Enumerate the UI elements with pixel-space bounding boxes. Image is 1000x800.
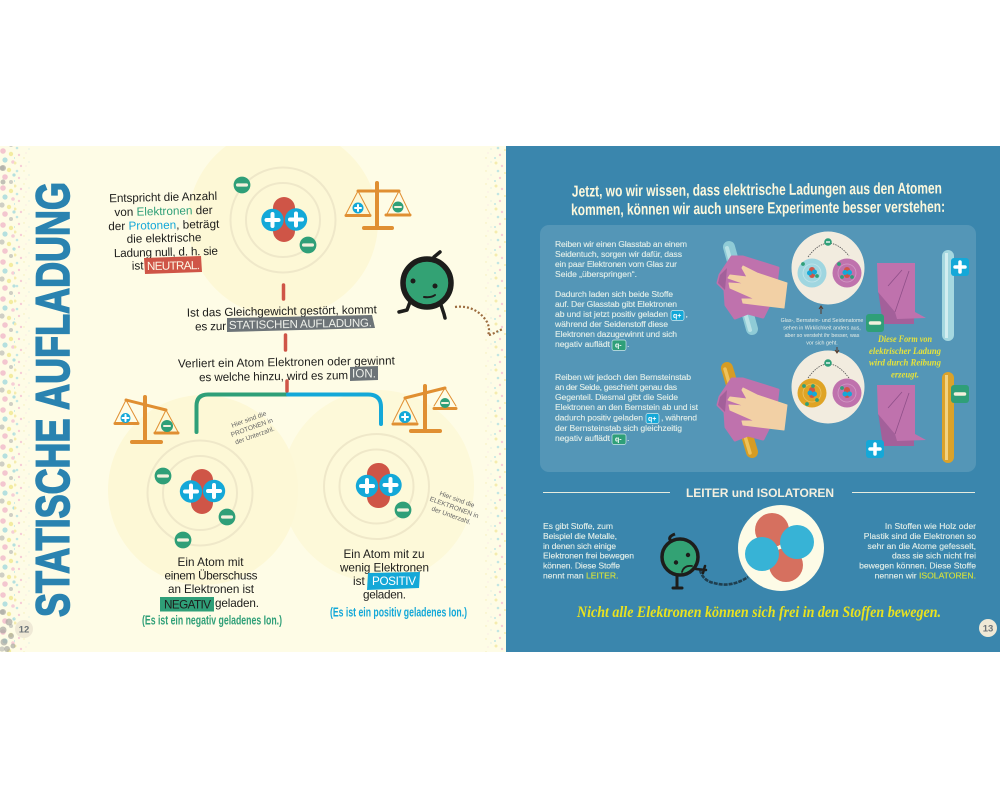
character: running electron (399, 252, 503, 335)
note: atoms simplified, with arrows: sehen in Wirklichkeit anders aus, (783, 326, 861, 332)
text: conductors: nennt man LEITER. (543, 570, 618, 580)
caption: positive ion: (Es ist ein positiv geladenes Ion.) (330, 606, 467, 620)
text: glass rod experiment: Seidentuch, sorgen wir dafür, dass (555, 249, 682, 259)
callout: friction: erzeugt. (891, 370, 919, 380)
text: conductors: Elektronen frei bewegen (543, 550, 634, 560)
text: neutral explanation: die elektrische (127, 231, 202, 246)
text: neutral explanation: ist (132, 259, 144, 273)
text: ion definition: es welche hinzu, wird es zum (199, 369, 348, 384)
text: glass rod experiment: Seide „überspringen“. (555, 269, 637, 279)
text: amber rod experiment: q+ (648, 416, 656, 423)
text: positive atom: Ein Atom mit zu (344, 548, 424, 561)
text: static charge: Ist das Gleichgewicht gestört, kommt (187, 303, 378, 320)
panel: right page background (506, 146, 1000, 652)
text: positive atom: geladen. (363, 588, 406, 602)
text: negative atom: einem Überschuss (164, 570, 258, 582)
text: insulators: sehr an die Atome gefesselt, (868, 541, 976, 551)
conclusion: Nicht alle Elektronen können sich frei in den Stoffen bewegen. (576, 604, 941, 621)
note: electrons in minority: Hier sind die (438, 490, 476, 510)
callout: friction: wird durch Reibung (869, 358, 941, 368)
illustration: silk cloth, charged positive (877, 385, 926, 446)
illustration: hand rubbing amber rod (718, 368, 787, 453)
illustration: hand rubbing glass rod (718, 247, 787, 330)
note: atoms simplified, with arrows: Glas-, Bernstein- und Seidenatome (781, 318, 863, 324)
text: amber rod experiment (555, 372, 699, 444)
text: insulators: bewegen können. Diese Stoffe (859, 560, 976, 570)
text: insulators: nennen wir ISOLATOREN. (875, 570, 976, 580)
text: amber rod experiment: Elektronen an den Bernstein ab und ist (555, 402, 699, 412)
text: glass rod experiment: Reiben wir einen Glasstab an einem (555, 239, 687, 249)
text: positive atom (339, 548, 429, 602)
text: amber rod experiment: dadurch positiv geladen (555, 412, 643, 422)
text: glass rod experiment: Elektronen dazugewinnt und sich (555, 329, 677, 339)
text: insulators: Plastik sind die Elektronen so (864, 531, 976, 541)
note: atoms simplified, with arrows: vor sich geht. (806, 340, 838, 346)
text: glass rod experiment: . (627, 339, 629, 349)
callout: friction: Diese Form von (877, 335, 932, 345)
text: conductors (543, 521, 634, 580)
text: amber rod experiment: q- (615, 436, 622, 444)
note: atoms simplified, with arrows: aber so versteht ihr besser, was (785, 333, 860, 339)
text: insulators: dass sie sich nicht frei (892, 550, 976, 560)
text: static charge (187, 303, 378, 334)
text: glass rod experiment: auf. Der Glasstab gibt Elektronen (555, 299, 677, 309)
note: electrons in minority (426, 488, 483, 528)
text: negative atom: NEGATIV (164, 598, 211, 612)
text: ion definition (178, 354, 396, 385)
panel: experiments (540, 225, 976, 472)
text: negative atom: geladen. (215, 597, 259, 610)
highlight: ION (350, 366, 378, 381)
illustration: amber rod negative (942, 372, 969, 463)
text: amber rod experiment: negativ auflädt (555, 433, 611, 443)
text: amber rod experiment: an der Seide, geschieht genau das (555, 382, 677, 392)
atom: positive ion (282, 390, 474, 582)
note: protons in minority: Hier sind die (231, 410, 268, 430)
red dashed connector (284, 285, 287, 391)
text: glass rod experiment: ein paar Elektronen vom Glas zur (555, 259, 677, 269)
text: neutral explanation: Ladung null, d. h. sie (114, 245, 218, 260)
text: insulators: In Stoffen wie Holz oder (885, 521, 976, 531)
text: static charge: es zur (195, 320, 226, 334)
note: protons in minority: der Unterzahl. (234, 426, 276, 446)
text: glass rod experiment: negativ auflädt (555, 339, 611, 349)
heading: Leiter und Isolatoren: LEITER und ISOLATOREN (686, 486, 834, 500)
note: protons in minority: PROTONEN in (230, 417, 274, 439)
text: amber rod experiment: Gegenteil. Diesmal gibt die Seide (555, 392, 678, 402)
text: glass rod experiment: , (686, 309, 688, 319)
text: neutral explanation: von Elektronen der (114, 204, 213, 219)
text: amber rod experiment: Reiben wir jedoch den Bernsteinstab (555, 372, 691, 382)
text: negative atom (160, 556, 259, 612)
text: neutral explanation: Entspricht die Anzahl (109, 190, 217, 205)
highlight: STATISCHEN AUFLADUNG: STATISCHEN AUFLADUNG. (229, 318, 372, 332)
illustration: atomic nucleus (738, 505, 824, 591)
text: neutral explanation (108, 190, 221, 273)
text: ion definition: Verliert ein Atom Elektronen oder gewinnt (178, 354, 396, 371)
illustration: glass rod positive (942, 250, 969, 341)
text: conductors: Beispiel die Metalle, (543, 531, 617, 541)
character: chained electron (662, 534, 748, 588)
text: glass rod experiment: ab und ist jetzt positiv geladen (555, 309, 668, 319)
scale: balanced (346, 183, 410, 228)
note: electrons in minority: ELEKTRONEN in (429, 496, 480, 520)
text: glass rod experiment: q- (615, 342, 622, 350)
text: conductors: können. Diese Stoffe (543, 560, 620, 570)
callout: friction: elektrischer Ladung (869, 347, 941, 357)
icon: plus on silk (866, 440, 884, 458)
text: insulators (859, 521, 976, 580)
page number 12 (15, 620, 33, 638)
highlight: NEUTRAL: NEUTRAL. (147, 259, 200, 273)
panel: left page background (0, 146, 506, 652)
text: neutral explanation: der Protonen, beträgt (108, 218, 220, 233)
text: amber rod experiment: der Bernsteinstab sich gleichzeitig (555, 423, 682, 433)
note: atoms simplified, with arrows (781, 306, 863, 353)
diagram: glass and silk atoms (792, 232, 864, 304)
page number 13: 13 (983, 624, 993, 634)
text: positive atom: wenig Elektronen (339, 562, 429, 574)
text: amber rod experiment: , während (661, 412, 697, 422)
atom: negative ion (108, 395, 298, 585)
scale: tilted towards protons (393, 386, 456, 431)
icon: minus on silk (866, 314, 884, 332)
bracket connector (196, 394, 381, 432)
page number 13 (979, 619, 997, 637)
text: negative atom: an Elektronen ist (168, 583, 255, 596)
note: protons in minority (227, 409, 277, 447)
diagram: amber and silk atoms (792, 350, 864, 424)
illustration: silk cloth, charged negative (877, 263, 926, 324)
scale: tilted towards electrons (115, 397, 178, 442)
heading: right page (571, 180, 945, 219)
text: positive atom: POSITIV (372, 575, 416, 588)
atom: neutral (188, 146, 378, 317)
text: glass rod experiment (554, 239, 688, 350)
note: electrons in minority: der Unterzahl. (430, 506, 472, 526)
callout: friction (869, 335, 941, 380)
page number 12: 12 (19, 624, 29, 636)
title: Statische Aufladung: STATISCHE AUFLADUNG (26, 182, 79, 617)
text: amber rod experiment: . (627, 433, 629, 443)
text: conductors: Es gibt Stoffe, zum (543, 521, 613, 531)
text: conductors: in denen sich einige (543, 541, 616, 551)
text: positive atom: ist (353, 575, 365, 588)
text: glass rod experiment: Dadurch laden sich beide Stoffe (555, 289, 673, 299)
text: negative atom: Ein Atom mit (178, 556, 244, 569)
caption: negative ion: (Es ist ein negativ geladenes Ion.) (142, 614, 282, 628)
text: glass rod experiment: q+ (673, 313, 681, 320)
text: glass rod experiment: während der Seidenstoff diese (554, 319, 668, 329)
highlight: ION: ION. (352, 368, 376, 380)
